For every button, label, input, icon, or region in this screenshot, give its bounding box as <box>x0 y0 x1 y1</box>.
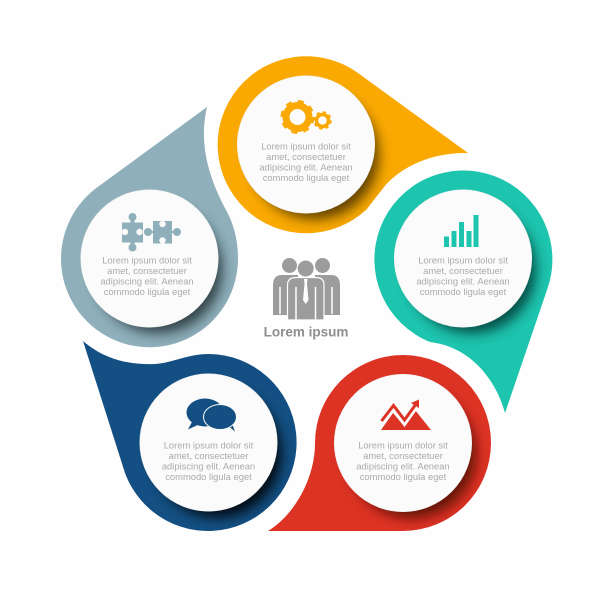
text: teal body: commodo ligula eget <box>420 286 507 297</box>
icon: speech bubbles <box>186 398 236 432</box>
text: red body: adipiscing elit. Aenean <box>356 460 450 472</box>
text: yellow body: commodo ligula eget <box>263 172 350 183</box>
text: blue body: amet, consectetuer <box>169 450 248 461</box>
text: yellow body: amet, consectetuer <box>266 151 346 162</box>
panel: grey-blue puzzle segment <box>61 107 238 347</box>
heading: center label: Lorem ipsum <box>264 324 348 340</box>
text: blue body: commodo ligula eget <box>165 471 252 482</box>
icon: bar chart <box>444 215 478 247</box>
text: teal body: Lorem ipsum dolor sit <box>418 254 508 266</box>
text: blue body: adipiscing elit. Aenean <box>162 460 255 472</box>
text: blue body: Lorem ipsum dolor sit <box>164 440 254 450</box>
text: teal body: amet, consectetuer <box>423 265 503 276</box>
text: teal body: adipiscing elit. Aenean <box>416 276 510 286</box>
text: yellow body: Lorem ipsum dolor sit <box>261 140 351 152</box>
text: grey-blue body: commodo ligula eget <box>104 286 191 297</box>
text: grey-blue body: Lorem ipsum dolor sit <box>102 254 192 266</box>
icon: puzzle pieces <box>122 213 181 252</box>
text: grey-blue body: amet, consectetuer <box>107 265 187 276</box>
icon: mountain with arrow <box>381 400 431 430</box>
panel: teal chart segment <box>374 171 552 413</box>
text: red body: commodo ligula eget <box>360 471 447 482</box>
panel: yellow gears segment <box>218 56 468 233</box>
text: yellow body: adipiscing elit. Aenean <box>259 162 353 172</box>
panel: red growth segment <box>268 355 491 531</box>
text: grey-blue body: adipiscing elit. Aenean <box>100 276 194 286</box>
icon: business team <box>273 258 340 320</box>
text: red body: Lorem ipsum dolor sit <box>358 440 448 450</box>
panel: blue speech segment <box>83 341 297 531</box>
text: red body: amet, consectetuer <box>363 450 443 461</box>
icon: gears <box>282 102 330 132</box>
